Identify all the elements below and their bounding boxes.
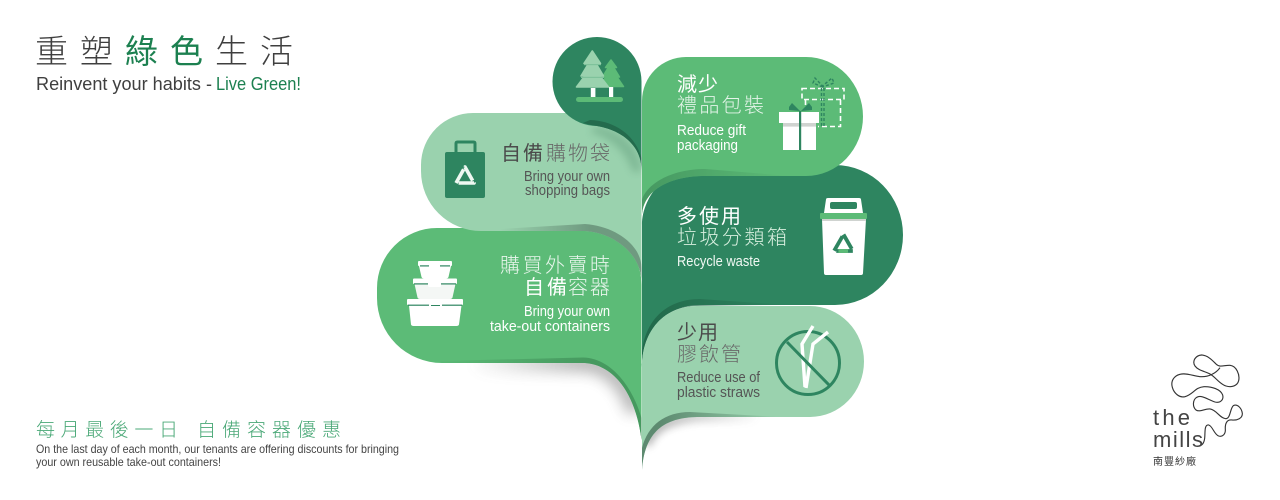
icon: trees — [576, 51, 624, 102]
heading: monthly offer: 每月最後一日 — [36, 419, 178, 441]
icon: recycling bin — [820, 198, 867, 275]
heading: shopping bags — [501, 142, 610, 165]
heading: recycle waste: 多使用 — [677, 205, 741, 228]
panel: reduce gift packaging — [642, 57, 863, 217]
text: straws english: Reduce use of — [677, 370, 761, 386]
icon: gift boxes — [779, 78, 844, 150]
icon: recycle symbol on bag — [456, 167, 474, 183]
heading: reduce gift packaging: 禮品包裝 — [677, 94, 764, 117]
text: containers english — [490, 304, 610, 335]
panel: shopping bags — [421, 113, 642, 282]
text: shopping bags english: Bring your own — [524, 169, 610, 185]
panel: recycle waste — [642, 165, 903, 367]
panel: tree — [552, 37, 642, 170]
heading: reduce straws: 膠飲管 — [677, 343, 741, 366]
logo squiggle — [1172, 355, 1242, 446]
logo wordmark: mills — [1153, 427, 1203, 452]
heading: containers: 容器 — [568, 276, 610, 299]
shadow: under straw panel — [646, 417, 770, 445]
text: gift english: Reduce gift — [677, 123, 746, 139]
text: gift english — [677, 123, 746, 154]
text: monthly offer description — [36, 442, 399, 469]
icon: tote bag — [445, 142, 485, 198]
heading: monthly offer — [36, 419, 341, 441]
text: recycle waste english: Recycle waste — [677, 254, 760, 270]
icon: no straws — [776, 326, 840, 394]
logo wordmark: the — [1153, 405, 1190, 430]
shadow: under container panel — [470, 363, 636, 412]
icon: stacked containers — [407, 261, 463, 326]
logo: the mills — [1153, 355, 1242, 468]
text: gift english: packaging — [677, 138, 738, 154]
text: containers english: take-out containers — [490, 319, 610, 335]
heading: monthly offer: 自備容器優惠 — [197, 419, 341, 441]
text: shopping bags english: shopping bags — [525, 183, 610, 199]
text: monthly offer description: your own reusable take-out containers! — [36, 455, 221, 469]
shadow: under tree panel — [590, 126, 641, 172]
heading: reduce gift packaging — [677, 73, 764, 117]
heading: containers: 自備 — [524, 276, 567, 299]
subtitle — [36, 74, 301, 94]
panel: reduce plastic straws — [642, 306, 864, 470]
title: 重塑綠色生活 — [35, 33, 305, 70]
heading: containers — [500, 254, 610, 299]
text: straws english — [677, 370, 761, 401]
text: straws english: plastic straws — [677, 385, 760, 401]
panel: take-out containers — [377, 228, 642, 440]
heading: shopping bags: 自備 — [501, 142, 543, 165]
heading: recycle waste: 垃圾分類箱 — [677, 226, 787, 249]
heading: reduce straws: 少用 — [677, 321, 718, 344]
subtitle: Reinvent your habits - — [36, 74, 212, 94]
heading: containers: 購買外賣時 — [500, 254, 610, 277]
text: shopping bags english — [524, 169, 610, 199]
logo wordmark — [1153, 405, 1203, 468]
heading: shopping bags: 購物袋 — [546, 142, 610, 165]
text: containers english: Bring your own — [524, 304, 610, 320]
subtitle: Live Green! — [216, 74, 301, 94]
heading: reduce straws — [677, 321, 741, 366]
heading: reduce gift packaging: 減少 — [677, 73, 718, 96]
logo wordmark: 南豐紗廠 — [1153, 455, 1196, 468]
icon: recycle symbol on bin — [834, 234, 853, 251]
heading: recycle waste — [677, 205, 787, 249]
text: monthly offer description: On the last day of each month, our tenants are offering discounts for bringing — [36, 442, 399, 456]
